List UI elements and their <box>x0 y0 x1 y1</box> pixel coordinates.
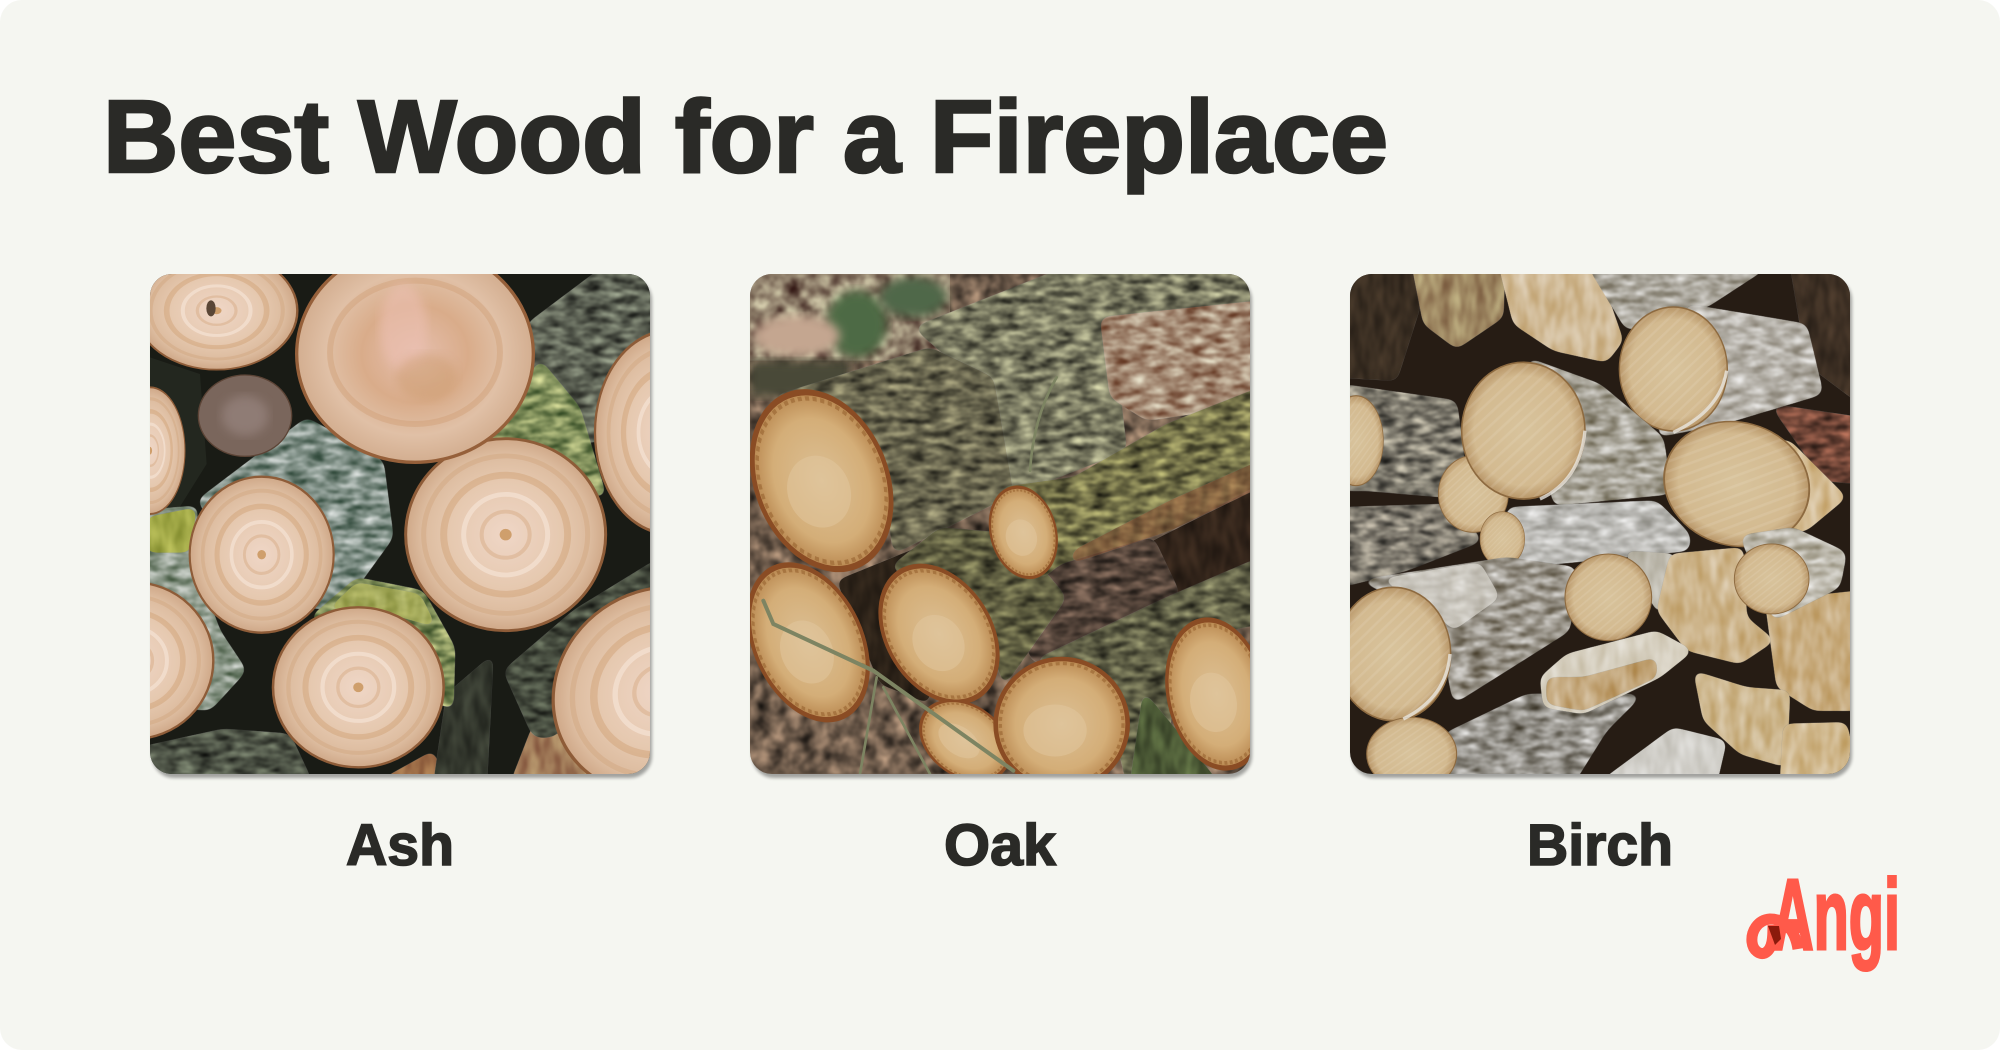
logo: Angi: Angi <box>1772 859 1900 971</box>
logo: Angi <box>1752 859 1900 971</box>
panel: ash photo <box>150 274 654 780</box>
title: Best Wood for a Fireplace <box>103 79 1388 194</box>
label: Birch: Birch <box>1527 813 1673 878</box>
small brown log end <box>198 375 292 456</box>
label: Ash: Ash <box>346 813 454 878</box>
panel: oak photo <box>750 274 1254 780</box>
label: Oak: Oak <box>944 813 1057 878</box>
panel: birch photo <box>1329 264 1860 791</box>
